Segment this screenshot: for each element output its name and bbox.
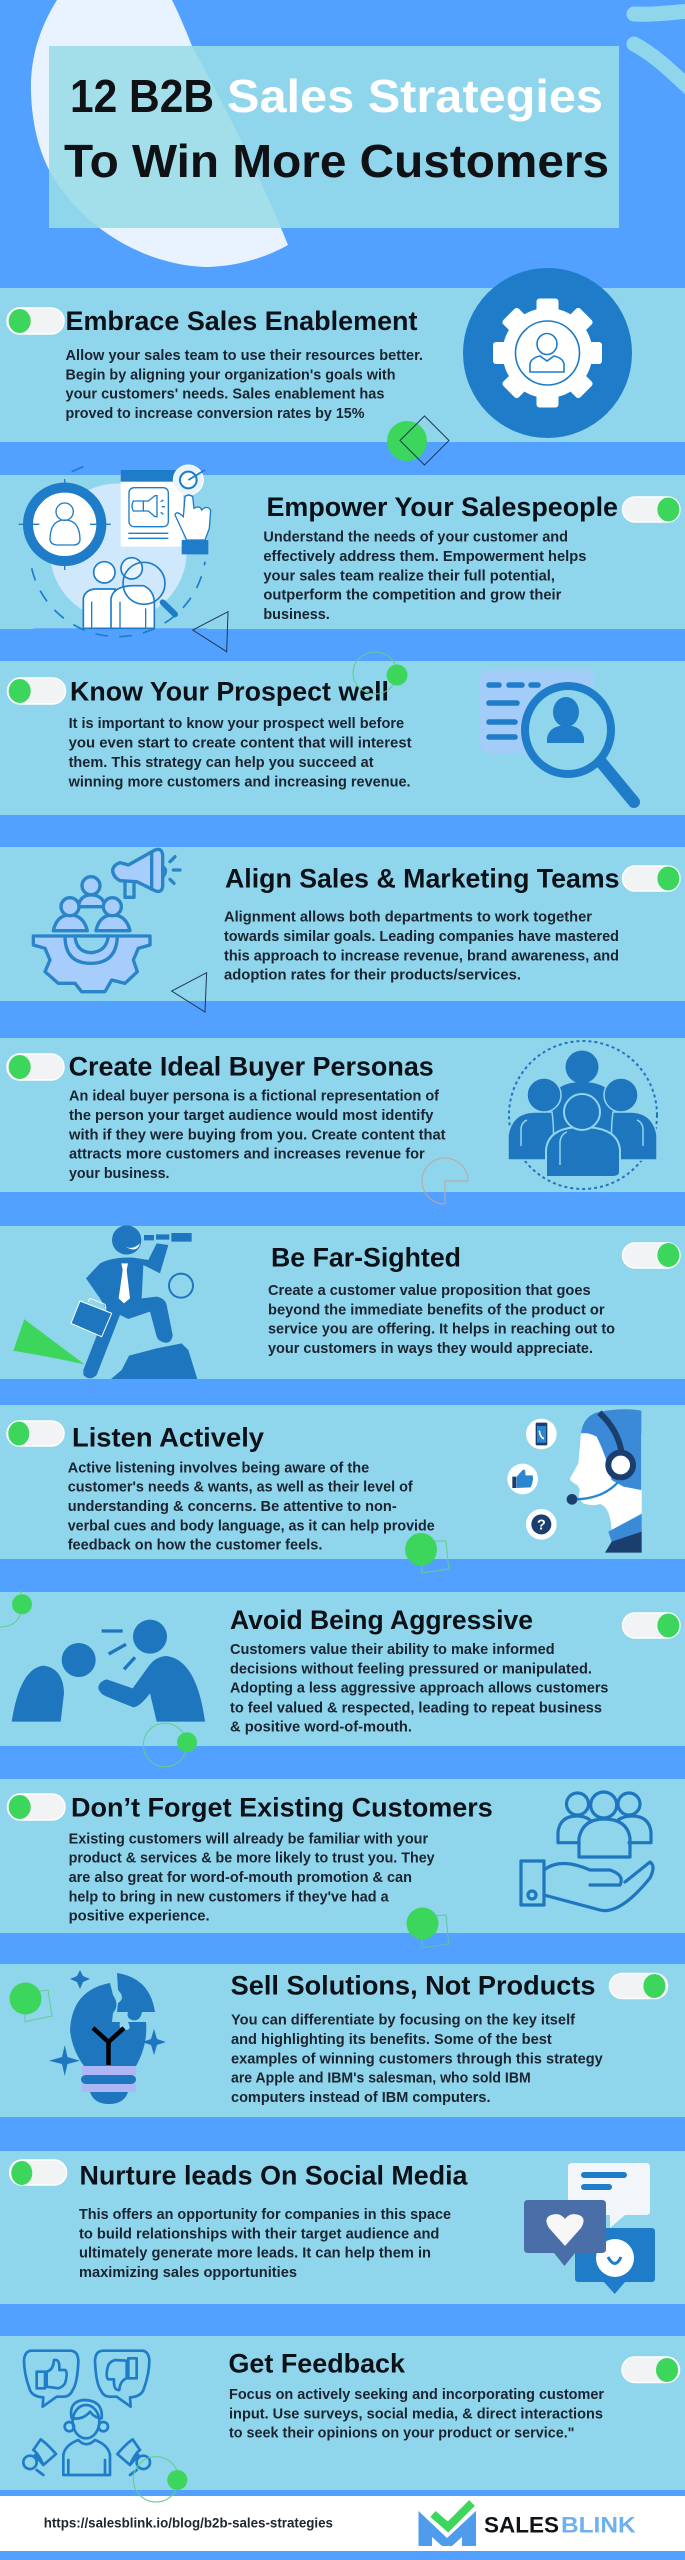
body text: help to bring in new customers if they've had a	[69, 1889, 389, 1905]
toggle	[622, 866, 680, 891]
band	[0, 288, 685, 442]
panel: Get Feedback	[0, 2336, 685, 2490]
body text: are Apple and IBM's salesman, who sold IBM	[231, 2071, 531, 2087]
body text: & positive word-of-mouth.	[230, 1720, 412, 1736]
body text: towards similar goals. Leading companies have mastered	[224, 929, 619, 945]
body text: beyond the immediate benefits of the product or	[268, 1302, 605, 1318]
body text: your business.	[69, 1166, 170, 1182]
icon: lightbulb puzzle with key	[49, 1970, 166, 2104]
body text: decisions without feeling pressured or manipulated.	[230, 1661, 592, 1677]
body text: input. Use surveys, social media, & direct interactions	[229, 2406, 603, 2422]
panel: Empower Your Salespeople	[0, 465, 685, 695]
body text	[231, 2013, 604, 2106]
title line 1 dark: 12 B2B	[70, 70, 214, 122]
toggle	[622, 497, 680, 522]
body text: your sales team realize their full potential,	[263, 568, 555, 584]
band	[0, 1038, 685, 1192]
body text	[68, 716, 412, 790]
body text: understanding & concerns. Be attentive to non-	[68, 1499, 397, 1515]
body text	[263, 530, 586, 623]
heading: Nurture leads On Social Media	[80, 2160, 468, 2190]
title	[49, 46, 619, 228]
toggle	[8, 678, 66, 704]
heading: Empower Your Salespeople	[266, 492, 618, 522]
panel: Know Your Prospect well	[0, 652, 685, 815]
decorative white shape	[31, 0, 288, 267]
body text: Create a customer value proposition that goes	[268, 1283, 591, 1299]
panel: Listen Actively	[0, 1405, 685, 1573]
body text: the person your target audience would most identify	[69, 1108, 434, 1124]
body text: effectively address them. Empowerment helps	[263, 549, 586, 565]
icon: gear with person	[463, 268, 632, 438]
panel: Sell Solutions, Not Products	[0, 1964, 685, 2117]
body text: Allow your sales team to use their resources better.	[66, 348, 423, 364]
body text: service you are offering. It helps in reaching out to	[268, 1322, 615, 1338]
body text: verbal cues and body language, as it can help provide	[68, 1518, 435, 1534]
title line 1 white: Sales Strategies	[227, 70, 603, 122]
toggle	[8, 1794, 65, 1820]
body text: this approach to increase revenue, brand awareness, and	[224, 948, 619, 964]
title panel	[49, 46, 619, 228]
band	[0, 475, 685, 629]
body text: to build relationships with their target audience and	[79, 2226, 439, 2242]
decor: triangle	[193, 612, 228, 652]
decorative teal strokes	[634, 10, 685, 98]
band	[0, 2336, 685, 2490]
band	[0, 1592, 685, 1746]
body text: An ideal buyer persona is a fictional representation of	[69, 1089, 439, 1105]
band	[0, 1226, 685, 1379]
source url: https://salesblink.io/blog/b2b-sales-strategies	[44, 2516, 333, 2531]
panel: Avoid Being Aggressive	[0, 1590, 685, 1767]
panel: Align Sales & Marketing Teams	[0, 847, 685, 1012]
body text: computers instead of IBM computers.	[231, 2090, 490, 2106]
body text: customer's needs & wants, as well as their level of	[68, 1480, 413, 1496]
body text: outperform the competition and grow their	[263, 588, 562, 604]
body text: and highlighting its benefits. Some of the best	[231, 2032, 552, 2048]
band	[0, 1405, 685, 1559]
logo text blue: BLINK	[561, 2513, 636, 2538]
heading: Be Far-Sighted	[271, 1243, 461, 1273]
body text: It is important to know your prospect well before	[69, 716, 404, 732]
body text: Active listening involves being aware of the	[68, 1460, 369, 1476]
decor: green dot and square	[406, 1908, 449, 1948]
decor: green dot with ring	[133, 2457, 187, 2502]
body text	[68, 1089, 446, 1182]
body text: Begin by aligning your organization's goals with	[66, 367, 396, 383]
panel: Don't Forget Existing Customers	[0, 1779, 685, 1948]
title overlap tint	[49, 46, 281, 228]
body text	[224, 910, 619, 984]
title line 2: To Win More Customers	[64, 135, 609, 187]
body text: your customers' needs. Sales enablement has	[66, 387, 384, 403]
decor: green dot and diamond	[387, 416, 449, 465]
body text: maximizing sales opportunities	[79, 2265, 297, 2281]
heading: Create Ideal Buyer Personas	[69, 1052, 434, 1082]
body text: You can differentiate by focusing on the key itself	[231, 2013, 575, 2029]
icon: two people talking	[12, 1620, 205, 1722]
body text: to seek their opinions on your product or service."	[229, 2426, 574, 2442]
body text	[230, 1642, 608, 1736]
logo text dark: SALES	[484, 2513, 559, 2538]
body text: to feel valued & respected, leading to repeat business	[230, 1700, 602, 1716]
body text: your customers in ways they would appreciate.	[268, 1341, 593, 1357]
band	[0, 2151, 685, 2304]
toggle	[622, 1613, 680, 1638]
band	[0, 847, 685, 1001]
toggle	[7, 1054, 64, 1080]
toggle	[7, 1421, 64, 1446]
toggle	[10, 2160, 67, 2185]
body text: Alignment allows both departments to work together	[224, 910, 592, 926]
decor: green wedge	[13, 1319, 84, 1364]
body text: business.	[263, 607, 330, 623]
body text: product & services & be more likely to trust you. They	[69, 1851, 435, 1867]
band	[0, 1964, 685, 2117]
icon: social chat bubbles	[524, 2163, 655, 2294]
toggle	[622, 2357, 680, 2382]
panel: Be Far-Sighted	[0, 1225, 685, 1379]
heading: Don’t Forget Existing Customers	[71, 1793, 493, 1823]
body text: are also great for word-of-mouth promotion & can	[69, 1870, 412, 1886]
band	[0, 661, 685, 815]
panel: Embrace Sales Enablement	[0, 268, 685, 465]
heading: Align Sales & Marketing Teams	[225, 863, 620, 893]
decor: triangle	[172, 973, 207, 1012]
body text: Customers value their ability to make informed	[230, 1642, 555, 1658]
icon: climber with telescope	[71, 1225, 197, 1379]
body text: Understand the needs of your customer and	[263, 530, 568, 546]
decor: green dot with ring top left	[0, 1590, 32, 1627]
icon: target, document and people	[19, 465, 211, 695]
body text: with if they were buying from you. Create content that	[68, 1127, 446, 1143]
footer	[0, 2457, 685, 2551]
toggle	[622, 1243, 680, 1268]
icon: feedback thumbs and person	[23, 2351, 150, 2475]
heading: Listen Actively	[72, 1423, 264, 1453]
toggle	[7, 308, 64, 334]
body text: Focus on actively seeking and incorporating customer	[229, 2387, 604, 2403]
body text: winning more customers and increasing revenue.	[68, 774, 411, 790]
heading: Sell Solutions, Not Products	[231, 1971, 595, 2001]
decor: green dot and square	[405, 1533, 449, 1573]
icon: team on gear with megaphone	[33, 849, 180, 992]
icon: headset agent	[507, 1409, 642, 1553]
body text: them. This strategy can help you succeed at	[69, 755, 374, 771]
body text	[268, 1283, 615, 1357]
icon: group of people	[508, 1041, 657, 1189]
panel: Create Ideal Buyer Personas	[0, 1038, 685, 1204]
body text: you even start to create content that will interest	[69, 736, 412, 752]
body text	[69, 1831, 435, 1925]
body text: This offers an opportunity for companies in this space	[79, 2207, 451, 2223]
body text: positive experience.	[69, 1909, 210, 1925]
decor: green dot with ring	[143, 1723, 197, 1767]
body text	[66, 348, 423, 422]
body text	[79, 2207, 451, 2281]
heading: Get Feedback	[228, 2349, 405, 2379]
icon: headset agent: ?	[537, 1518, 546, 1534]
decor: green dot with ring	[353, 652, 408, 694]
heading: Embrace Sales Enablement	[66, 306, 418, 336]
decor: pie outline	[422, 1158, 468, 1204]
body text: ultimately generate more leads. It can help them in	[79, 2246, 431, 2262]
body text: Adopting a less aggressive approach allows customers	[230, 1681, 608, 1697]
panel: Nurture leads On Social Media	[0, 2151, 685, 2304]
icon: magnifier over profile	[480, 669, 634, 802]
icon: hand holding customers	[521, 1792, 653, 1911]
body text: examples of winning customers through this strategy	[231, 2051, 604, 2067]
body text	[229, 2387, 604, 2442]
heading: Avoid Being Aggressive	[230, 1605, 533, 1635]
decor: green dot and square	[10, 1982, 52, 2022]
band	[0, 1779, 685, 1933]
body text: attracts more customers and increases revenue for	[69, 1147, 425, 1163]
body text: proved to increase conversion rates by 15%	[66, 406, 365, 422]
toggle	[610, 1974, 668, 1998]
footer band	[0, 2496, 685, 2551]
body text: Existing customers will already be familiar with your	[69, 1831, 428, 1847]
body text	[68, 1460, 435, 1554]
heading: Know Your Prospect well	[70, 677, 389, 707]
logo mark	[418, 2503, 476, 2546]
body text: adoption rates for their products/services.	[224, 968, 521, 984]
body text: feedback on how the customer feels.	[68, 1538, 322, 1554]
